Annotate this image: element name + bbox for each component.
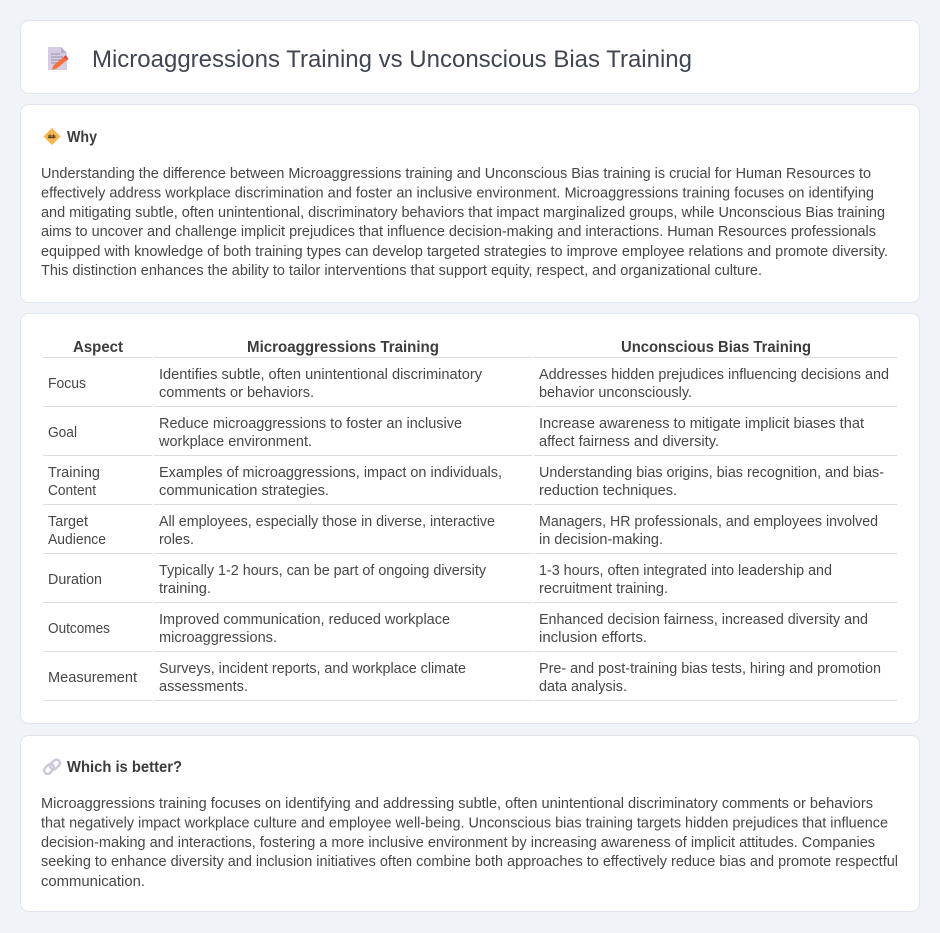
row: target audience: All employees, especially those in diverse, interactive <box>159 514 495 530</box>
text block: why paragraph: This distinction enhances the ability to tailor interventions that support equity, respect, and organizational culture. <box>41 263 762 279</box>
row: outcomes: microaggressions. <box>159 630 277 646</box>
row: duration: recruitment training. <box>539 581 668 597</box>
text block: which is better paragraph: decision-making and interactions, fostering a more inclusive environment by increasing awareness of implicit attitudes. Companies <box>41 835 875 851</box>
heading: which is better: Which is better? <box>67 759 182 776</box>
text block: which is better paragraph: communication. <box>41 874 145 890</box>
row: outcomes: inclusion efforts. <box>539 630 647 646</box>
row: training content: Content <box>48 483 96 499</box>
row: target audience <box>43 514 897 554</box>
row: focus: comments or behaviors. <box>159 385 314 401</box>
icon: document with pencil <box>48 47 68 70</box>
table header: Aspect <box>73 339 124 356</box>
row: training content: Examples of microaggressions, impact on individuals, <box>159 465 502 481</box>
row: measurement: data analysis. <box>539 679 627 695</box>
row: duration: Typically 1-2 hours, can be part of ongoing diversity <box>159 563 487 579</box>
row: goal: Increase awareness to mitigate implicit biases that <box>539 416 864 432</box>
row: training content: Understanding bias origins, bias recognition, and bias- <box>539 465 884 481</box>
row: goal: Reduce microaggressions to foster an inclusive <box>159 416 462 432</box>
panel: which is better <box>20 736 920 912</box>
text block: which is better paragraph: Microaggressions training focuses on identifying and addressing subtle, often unintentional discriminatory comments or behaviors <box>41 796 873 812</box>
row: focus: behavior unconsciously. <box>539 385 692 401</box>
panel: why <box>20 104 920 302</box>
text block: which is better paragraph <box>41 796 898 890</box>
panel: comparison table <box>20 314 920 724</box>
row: measurement: Measurement <box>48 670 137 686</box>
row: outcomes <box>43 612 897 652</box>
row: measurement: assessments. <box>159 679 248 695</box>
row: duration: Duration <box>48 572 102 588</box>
text block: which is better paragraph: that negatively impact workplace culture and employee well-being. Unconscious bias training targets hidden prejudices that influence <box>41 816 888 832</box>
text block: why paragraph <box>41 166 888 279</box>
row: goal <box>43 416 897 456</box>
row: outcomes: Improved communication, reduced workplace <box>159 612 450 628</box>
row: outcomes: Outcomes <box>48 621 110 637</box>
row: duration: 1-3 hours, often integrated into leadership and <box>539 563 832 579</box>
row: target audience: Audience <box>48 532 106 548</box>
row: target audience: Managers, HR professionals, and employees involved <box>539 514 878 530</box>
text block: why paragraph: aims to uncover and challenge implicit prejudices that influence decision-making and interactions. Human Resources professionals <box>41 224 876 240</box>
row: focus: Addresses hidden prejudices influencing decisions and <box>539 367 889 383</box>
row: focus <box>43 367 897 407</box>
row: training content: Training <box>48 465 100 481</box>
icon: warning diamond <box>44 128 60 145</box>
row: measurement <box>43 661 897 701</box>
heading: why: Why <box>67 129 97 146</box>
row: training content: reduction techniques. <box>539 483 677 499</box>
title: Microaggressions Training vs Unconscious Bias Training <box>92 46 692 73</box>
row: target audience: roles. <box>159 532 194 548</box>
row: outcomes: Enhanced decision fairness, increased diversity and <box>539 612 868 628</box>
row: target audience: in decision-making. <box>539 532 663 548</box>
row: goal: affect fairness and diversity. <box>539 434 719 450</box>
text block: why paragraph: effectively address workplace discrimination and foster an inclusive environment. Microaggressions training focuses on identifying <box>41 186 874 202</box>
header panel <box>20 20 920 94</box>
row: goal: Goal <box>48 425 77 441</box>
icon: link <box>43 758 61 775</box>
table header <box>43 339 897 358</box>
table header: Unconscious Bias Training <box>621 339 811 356</box>
row: duration: training. <box>159 581 211 597</box>
text block: why paragraph: equipped with knowledge of both training types can develop targeted strategies to improve employee relations and promote diversity. <box>41 244 888 260</box>
row: focus: Focus <box>48 376 86 392</box>
row: measurement: Pre- and post-training bias tests, hiring and promotion <box>539 661 881 677</box>
table header: Microaggressions Training <box>247 339 439 356</box>
text block: why paragraph: and mitigating subtle, often unintentional, discriminatory behaviors that impact marginalized groups, while Unconscious Bias training <box>41 205 885 221</box>
row: measurement: Surveys, incident reports, and workplace climate <box>159 661 466 677</box>
row: training content: communication strategies. <box>159 483 329 499</box>
row: goal: workplace environment. <box>158 434 312 450</box>
row: training content <box>43 465 897 505</box>
row: duration <box>43 563 897 603</box>
text block: which is better paragraph: seeking to enhance diversity and inclusion initiatives often combine both approaches to effectively reduce bias and promote respectful <box>41 854 898 870</box>
row: focus: Identifies subtle, often unintentional discriminatory <box>159 367 483 383</box>
row: target audience: Target <box>48 514 88 530</box>
text block: why paragraph: Understanding the difference between Microaggressions training and Unconscious Bias training is crucial for Human Resources to <box>41 166 871 182</box>
